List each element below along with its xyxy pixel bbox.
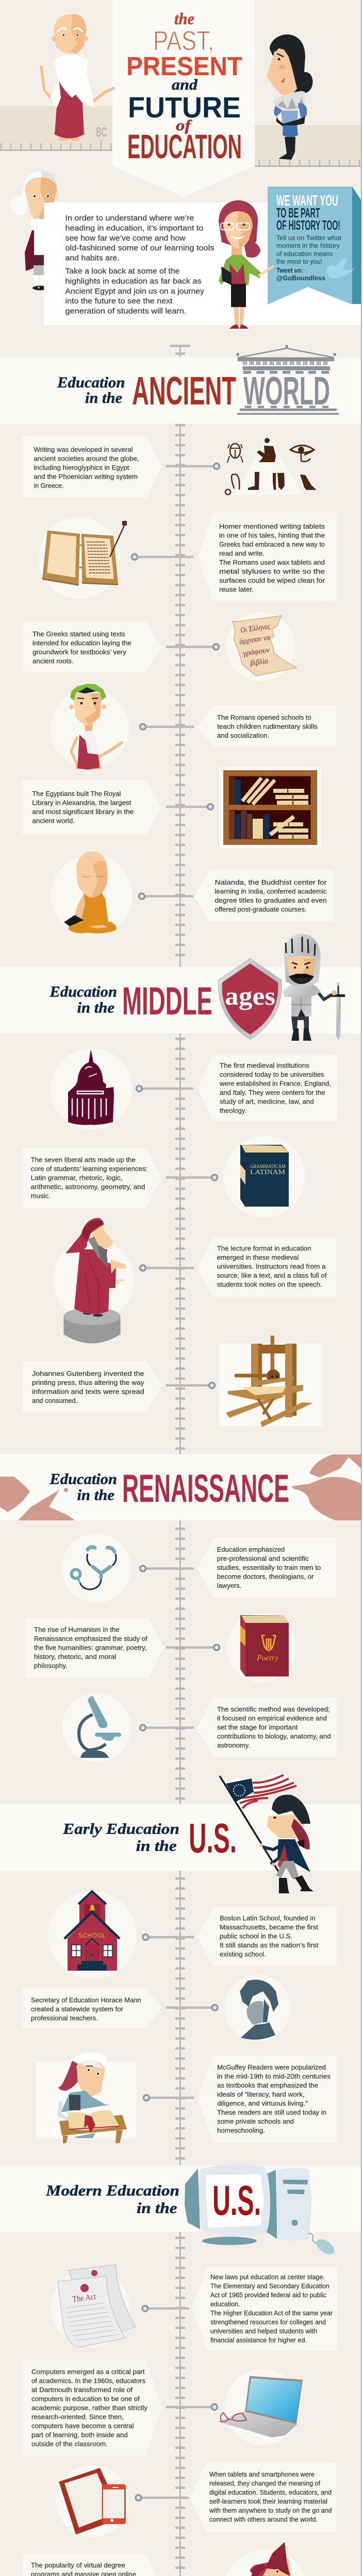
- connector: [166, 1645, 220, 1650]
- title banner: [112, 0, 255, 197]
- timeline item: greek texts: [23, 612, 296, 681]
- timeline item: printing press: [23, 1335, 322, 1427]
- section header: early US: [0, 1773, 361, 1893]
- text: [209, 2470, 332, 2523]
- title text: of: [176, 117, 192, 134]
- ribbon text: Tweet us:: [276, 267, 303, 274]
- text: contributions to biology, anatomy, and: [217, 1732, 331, 1740]
- timeline item: liberal arts: [23, 1136, 305, 1217]
- text: [220, 1914, 319, 1958]
- text: Secretary of Education Horace Mann: [31, 1996, 141, 2004]
- heading: ANCIENT: [132, 369, 236, 413]
- text: Education emphasized: [217, 1546, 285, 1553]
- text: McGuffey Readers were popularized: [217, 2063, 326, 2071]
- text: of academics. In the 1960s, educators: [31, 2377, 146, 2384]
- text: astronomy.: [217, 1741, 250, 1749]
- connector: [140, 724, 194, 730]
- timeline item: universities: [51, 1048, 337, 1130]
- text: The Higher Education Act of the same year: [210, 2309, 333, 2317]
- scroll text: βιβλία: [249, 657, 269, 668]
- text: Nalanda, the Buddhist center for: [215, 878, 327, 886]
- connector: [166, 2005, 218, 2010]
- text: [34, 1626, 147, 1669]
- timeline item: boston latin school: [48, 1891, 337, 1979]
- timeline item: humanism: [25, 1613, 296, 1682]
- connector: [142, 2306, 189, 2311]
- intro text: old-fashioned some of our learning tools: [65, 244, 214, 252]
- illustration: stethoscope: [62, 1534, 131, 1603]
- text: [215, 878, 327, 913]
- text: Latin grammar, rhetoric, logic,: [31, 1174, 123, 1181]
- text: Computers emerged as a critical part: [31, 2368, 145, 2376]
- text: ancient world.: [32, 817, 75, 824]
- icon: twitter bird: [326, 258, 354, 279]
- scroll text: Οι Έλληνες: [240, 622, 271, 635]
- heading: [62, 1816, 237, 1862]
- text: students took notes on the speech.: [217, 1281, 322, 1289]
- illustration: wax tablet: [39, 517, 127, 599]
- text: [217, 714, 318, 739]
- heading: Education: [57, 374, 125, 391]
- title text: PAST,: [153, 26, 214, 56]
- connector: [166, 644, 219, 650]
- text: offered post-graduate courses.: [215, 906, 307, 913]
- text: homeschooling.: [217, 2127, 265, 2134]
- ribbon text: @GoBoundless: [276, 275, 325, 282]
- text: The Elementary and Secondary Education: [210, 2282, 329, 2290]
- text: and most significant library in the: [32, 808, 134, 816]
- header ground strip left with BC ruler: [0, 106, 112, 151]
- text: created a statewide system for: [31, 2005, 124, 2013]
- text: emerged in these medieval: [217, 1253, 299, 1261]
- text: some private schools and: [217, 2117, 294, 2125]
- icon: desktop computer with US: U.S.: [212, 2177, 261, 2224]
- header ground strip left with BC ruler: BC: [96, 124, 107, 140]
- text: The Greeks started using texts: [32, 630, 125, 638]
- illustration: mann portrait: [224, 1975, 290, 2041]
- text: diligence, and virtuous living.”: [217, 2099, 308, 2107]
- connector: [143, 2095, 194, 2100]
- scroll text: γράφουν: [242, 646, 270, 658]
- text: [32, 790, 134, 824]
- title text: PRESENT: [126, 52, 242, 81]
- icon: shield with word ages: ages: [225, 981, 275, 1010]
- intro text: into the future to see the next: [65, 297, 173, 306]
- text: [217, 1546, 321, 1589]
- icon: desktop computer with US: [185, 2164, 337, 2257]
- text: study of art, medicine, law, and: [220, 1097, 314, 1106]
- section header: middle ages: [0, 934, 361, 1041]
- heading: [57, 369, 330, 413]
- ribbon text: [276, 193, 342, 282]
- text: Renaissance emphasized the study of: [34, 1635, 147, 1642]
- book title: GRAMMATICAM: [250, 1164, 286, 1169]
- connector: [132, 554, 193, 560]
- text: computers have become a central: [31, 2422, 134, 2430]
- text: [31, 1156, 147, 1199]
- panel: call to action ribbon: [268, 187, 361, 304]
- text: part of learning, both inside and: [31, 2431, 128, 2439]
- intro text: Take a look back at some of the: [65, 267, 179, 276]
- text: philosophy.: [34, 1662, 68, 1669]
- intro text: and habits are.: [65, 254, 120, 263]
- text: Johannes Gutenberg invented the: [32, 1369, 144, 1377]
- text: New laws put education at center stage.: [210, 2273, 325, 2281]
- text: The first medieval institutions: [220, 1061, 310, 1070]
- section header: modern US: [0, 2164, 361, 2257]
- timeline item: nalanda: [51, 851, 334, 936]
- intro text: Ancient Egypt and join us on a journey: [65, 287, 205, 296]
- scroll text: [239, 622, 271, 668]
- text: including hieroglyphics in Egypt: [34, 464, 129, 471]
- heading: U.S.: [189, 1816, 237, 1862]
- text: ancient societies around the globe,: [34, 454, 139, 463]
- illustration: poetry book: [227, 1613, 296, 1682]
- text: Massachusetts, became the first: [220, 1923, 318, 1931]
- illustration: the act documents: [52, 2265, 135, 2347]
- illustration: girl reading: [36, 2053, 136, 2143]
- text: learning in India, conferred academic: [215, 887, 327, 895]
- illustration: printing press: [219, 1335, 322, 1427]
- text: financial assistance for higher ed.: [210, 2336, 307, 2344]
- text: The scientific method was developed;: [217, 1705, 330, 1713]
- heading: in the: [137, 2200, 177, 2217]
- timeline spine: [162, 345, 198, 2576]
- connector: [140, 1566, 194, 1571]
- timeline item: moocs: [23, 2542, 308, 2576]
- text: groundwork for textbooks’ very: [32, 648, 126, 656]
- timeline item: mcguffey readers: [36, 2053, 337, 2143]
- intro text: [65, 214, 214, 316]
- text: [217, 2063, 331, 2134]
- text: These readers are still used today in: [217, 2108, 326, 2116]
- text: The Romans opened schools to: [217, 714, 311, 721]
- text: public school in the U.S.: [220, 1932, 292, 1940]
- text: information and texts were spread: [32, 1387, 144, 1395]
- heading: [49, 979, 212, 1023]
- text: [31, 2561, 145, 2576]
- illustration: poetry book: Poetry: [256, 1654, 279, 1663]
- timeline item: tablets and smartphones: [56, 2463, 336, 2537]
- ribbon text: the most to you!: [276, 258, 322, 265]
- text: [219, 1061, 331, 1114]
- connector: [166, 464, 220, 469]
- section header: ancient world: [0, 345, 361, 423]
- text: as textbooks that emphasized the: [217, 2081, 318, 2089]
- connector: [139, 893, 193, 899]
- title text: FUTURE: [128, 91, 241, 124]
- connector: [166, 804, 213, 810]
- connector: [140, 1725, 194, 1731]
- timeline item: new laws: [52, 2265, 337, 2350]
- title text: [126, 9, 242, 165]
- text: it focused on empirical evidence and: [217, 1714, 327, 1722]
- panel: intro: [44, 202, 361, 325]
- illustration: latin grammar book: [224, 1136, 305, 1217]
- heading: Early Education: [62, 1821, 179, 1838]
- text: Homer mentioned writing tablets: [219, 522, 325, 530]
- timeline item: royal library: [23, 767, 321, 848]
- timeline item: pre-professional studies: [62, 1534, 336, 1603]
- text: considered today to be universities: [220, 1071, 324, 1078]
- timeline item: roman schools: [51, 684, 336, 770]
- text: intended for education laying the: [32, 639, 131, 647]
- text: The popularity of virtual degree: [31, 2561, 125, 2569]
- text: existing school.: [220, 1950, 266, 1958]
- heading: [45, 2182, 179, 2217]
- character: renaissance lady: [267, 35, 312, 160]
- text: outside of the classroom.: [31, 2440, 108, 2448]
- connector: [143, 1934, 194, 1940]
- text: degree titles to graduates and even: [215, 896, 327, 904]
- text: [31, 2368, 148, 2448]
- text: music.: [31, 1192, 51, 1199]
- illustration: schoolhouse: SCHOOL: [78, 1931, 106, 1939]
- text: [31, 1996, 141, 2022]
- illustration: greek scroll: [226, 612, 296, 681]
- text: Greeks had embraced a new way to: [219, 540, 325, 548]
- text: theology.: [220, 1107, 246, 1114]
- connector: [166, 1175, 218, 1180]
- text: universities. Instructors read from a: [217, 1263, 326, 1270]
- text: The Romans used wax tablets and: [219, 558, 325, 566]
- text: ancient roots.: [32, 657, 73, 665]
- intro text: see how far we’ve come and how: [65, 234, 186, 243]
- illustration: schoolhouse: [48, 1891, 136, 1979]
- text: core of students’ learning experiences:: [31, 1165, 147, 1173]
- book title: [250, 1164, 286, 1176]
- text: were established in France, England,: [219, 1080, 331, 1087]
- text: the five humanities: grammar, poetry,: [34, 1643, 147, 1652]
- text: strengthened resources for colleges and: [210, 2318, 326, 2326]
- heading: Education: [49, 983, 117, 1000]
- text: research-oriented. Since then,: [31, 2413, 124, 2420]
- icon: shield with word ages: [219, 958, 282, 1040]
- character: knight: [283, 934, 345, 1041]
- heading: in the: [85, 389, 122, 406]
- text: in the mid-19th to mid-20th centuries: [217, 2072, 331, 2080]
- text: history, rhetoric, and moral: [34, 1653, 117, 1660]
- text: Act of 1965 provided federal aid to public: [210, 2291, 326, 2299]
- connector: [166, 2404, 218, 2410]
- text: reuse later.: [219, 585, 254, 594]
- illustration: the act documents: The Act: [72, 2292, 97, 2304]
- text: [32, 1369, 144, 1404]
- heading: MIDDLE: [122, 979, 212, 1023]
- heading: Education: [49, 1470, 117, 1487]
- text: self-learners took their learning material: [209, 2498, 327, 2505]
- illustration: hieroglyphs: [225, 435, 317, 495]
- text: connect with others around the world.: [209, 2515, 318, 2523]
- illustration: microscope: [62, 1693, 131, 1762]
- text: in one of his tales, hinting that the: [219, 532, 325, 539]
- text: in Greece.: [34, 482, 64, 489]
- connector: [136, 2495, 189, 2501]
- ribbon text: of education means: [276, 250, 333, 258]
- text: metal styluses to write so the: [219, 568, 325, 575]
- text: and the Phoenician writing system: [34, 473, 138, 480]
- illustration: laptop and glasses: [217, 2369, 303, 2445]
- character: ancient philosopher: [41, 14, 113, 141]
- illustration: tablet and phone: [56, 2465, 128, 2537]
- heading: Modern Education: [45, 2182, 179, 2199]
- heading: in the: [77, 999, 114, 1016]
- text: The lecture format in education: [217, 1245, 311, 1252]
- text: [219, 522, 325, 594]
- illustration: roman boy: [51, 684, 129, 770]
- icon: greek temple: [236, 345, 339, 415]
- text: computers in education to be one of: [31, 2395, 140, 2403]
- text: education.: [210, 2300, 240, 2308]
- illustration: domed university: [51, 1048, 132, 1130]
- connector: [166, 1383, 214, 1388]
- heading: in the: [77, 1487, 114, 1504]
- text: source, like a text, and a class full of: [217, 1272, 327, 1279]
- text: digital education. Students, educators, and: [209, 2488, 332, 2496]
- ribbon text: Tell us on Twitter what: [276, 234, 342, 242]
- text: [210, 2273, 333, 2344]
- text: The Egyptians built The Royal: [32, 790, 121, 798]
- illustration: lecturer statue: [53, 1218, 134, 1344]
- title text: the: [174, 9, 194, 28]
- text: Library in Alexandria, the largest: [32, 799, 131, 807]
- text: studies, essentially to train men to: [217, 1564, 321, 1571]
- character: teacher: [219, 200, 273, 329]
- timeline item: horace mann: [23, 1975, 290, 2041]
- text: universities and helped students with: [210, 2327, 317, 2335]
- text: and Italy. They were centers for the: [220, 1089, 325, 1096]
- header ground strip right with ruler: [255, 125, 361, 167]
- text: read and write.: [219, 549, 265, 557]
- timeline item: writing tablets: [39, 512, 337, 601]
- text: at Dartmouth transformed role of: [31, 2386, 133, 2394]
- text: professional teachers.: [31, 2014, 98, 2022]
- intro text: highlights in education as far back as: [65, 277, 201, 285]
- text: released, they changed the meaning of: [209, 2479, 320, 2487]
- connector: [140, 1265, 194, 1270]
- text: It still stands as the nation’s first: [220, 1941, 319, 1949]
- text: academic purpose, rather than strictly: [31, 2404, 148, 2412]
- ribbon text: TO BE PART: [276, 205, 320, 221]
- text: become doctors, theologians, or: [217, 1572, 314, 1581]
- intro text: heading in education, it’s important to: [65, 224, 203, 232]
- text: When tablets and smartphones were: [209, 2470, 315, 2478]
- text: [34, 446, 139, 489]
- text: [217, 1705, 331, 1749]
- text: [32, 630, 131, 665]
- intro text: In order to understand where we’re: [65, 214, 194, 223]
- text: lawyers.: [217, 1582, 241, 1589]
- timeline item: computers: [23, 2361, 303, 2455]
- intro text: generation of students will learn.: [65, 307, 187, 316]
- text: surfaces could be wiped clean for: [219, 577, 325, 584]
- ribbon text: moment in the history: [276, 242, 340, 249]
- illustration: library shelves: [220, 767, 321, 848]
- character: colonial statesman: [10, 171, 63, 291]
- title text: EDUCATION: [127, 127, 242, 165]
- text: arithmetic, astronomy, geometry, and: [31, 1183, 145, 1191]
- connector: [136, 1086, 193, 1091]
- text: The rise of Humanism in the: [34, 1626, 120, 1633]
- book title: LATINAM: [250, 1168, 286, 1176]
- text: printing press, thus altering the way: [32, 1379, 144, 1386]
- heading: [49, 1467, 289, 1511]
- scroll text: άρχισαν να: [239, 634, 271, 646]
- illustration: boy at laptop: [223, 2542, 308, 2576]
- heading: in the: [136, 1838, 177, 1855]
- illustration: monk: [51, 851, 133, 936]
- title text: and: [172, 76, 198, 93]
- timeline item: writing: [23, 435, 317, 498]
- timeline item: scientific method: [62, 1693, 337, 1762]
- text: and socialization.: [217, 732, 269, 739]
- section header: renaissance: [0, 1454, 361, 1520]
- text: set the stage for important: [217, 1723, 298, 1731]
- character: revolutionary flag bearer: [220, 1773, 314, 1893]
- text: and consumed.: [32, 1397, 77, 1404]
- text: Boston Latin School, founded in: [220, 1914, 315, 1922]
- text: teach children rudimentary skills: [217, 722, 318, 731]
- text: The seven liberal arts made up the: [31, 1156, 136, 1163]
- timeline item: lecture format: [53, 1218, 336, 1344]
- text: pre-professional and scientific: [217, 1555, 309, 1562]
- text: [217, 1245, 327, 1289]
- text: Writing was developed in several: [34, 446, 133, 453]
- decorative world map: [0, 1454, 361, 1520]
- text: ideals of “literacy, hard work,: [217, 2091, 305, 2098]
- text: with them anywhere to study on the go and: [209, 2506, 332, 2514]
